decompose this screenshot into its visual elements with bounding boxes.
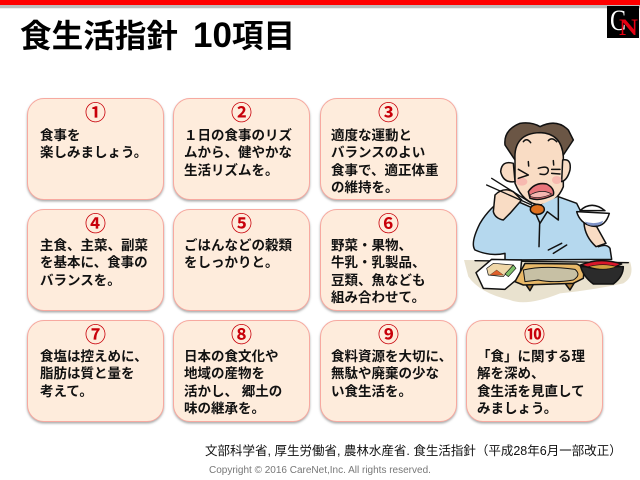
card 10: みましょう。 [477,401,557,416]
card 10: 解を深め、 [477,366,544,381]
card 4: ④ [85,213,106,236]
card 8: 地域の産物を [184,366,265,381]
card 1: ① [85,102,106,125]
card 6: 豆類、魚なども [331,273,426,288]
card 9: 無駄や廃棄の少な [331,366,439,381]
card 7: ⑦ [85,324,106,347]
copyright: Copyright © 2016 CareNet,Inc. All rights reserved. [209,465,431,476]
card 6 [320,209,457,311]
card 7: 脂肪は質と量を [40,366,134,381]
card 6: 牛乳・乳製品、 [331,255,426,270]
card 6: 組み合わせて。 [331,290,425,305]
card 10 [466,320,603,422]
card 1: 食事を [40,128,80,143]
card 3 [320,98,457,200]
card 4: バランスを。 [40,273,121,288]
card 8 [173,320,310,422]
logo [607,6,639,38]
card 7 [27,320,164,422]
card 4 [27,209,164,311]
card 9: ⑨ [378,324,399,347]
card 2: １日の食事のリズ [184,128,292,143]
card 1: 楽しみましょう。 [40,145,147,160]
card 9: 食料資源を大切に、 [331,349,452,364]
card 8: 活かし、 郷土の [184,384,282,399]
card 7: 考えて。 [40,384,93,399]
card 2: ムから、健やかな [184,145,292,160]
card 5: ごはんなどの穀類 [184,238,292,253]
card 5: ⑤ [231,213,252,236]
card 3: の維持を。 [331,180,398,195]
card 7: 食塩は控えめに、 [40,349,148,364]
card 8: 日本の食文化や [184,349,278,364]
card 4: 主食、主菜、副菜 [40,238,148,253]
card 4: を基本に、食事の [40,255,148,270]
card 2: ② [231,102,252,125]
illustration: man eating a meal [464,122,632,302]
citation: 文部科学省, 厚生労働省, 農林水産省. 食生活指針（平成28年6月一部改正） [205,444,622,458]
top red band [0,0,640,9]
card 3: 適度な運動と [331,128,412,143]
card 9 [320,320,457,422]
card 5 [173,209,310,311]
card 10: 食生活を見直して [477,384,585,399]
card 6: 野菜・果物、 [331,238,412,253]
card 1 [27,98,164,200]
card 2 [173,98,310,200]
card 8: 味の継承を。 [184,401,265,416]
card 3: ③ [378,102,399,125]
card 6: ⑥ [378,213,399,236]
card 10: 「食」に関する理 [477,349,585,364]
title: 食生活指針 10項目 [20,16,295,55]
card 10: ⑩ [524,324,545,347]
card 2: 生活リズムを。 [184,163,278,178]
card 8: ⑧ [231,324,252,347]
card 5: をしっかりと。 [184,255,278,270]
card 3: バランスのよい [331,145,425,160]
card 3: 食事で、適正体重 [331,163,438,178]
card 9: い食生活を。 [331,384,412,399]
